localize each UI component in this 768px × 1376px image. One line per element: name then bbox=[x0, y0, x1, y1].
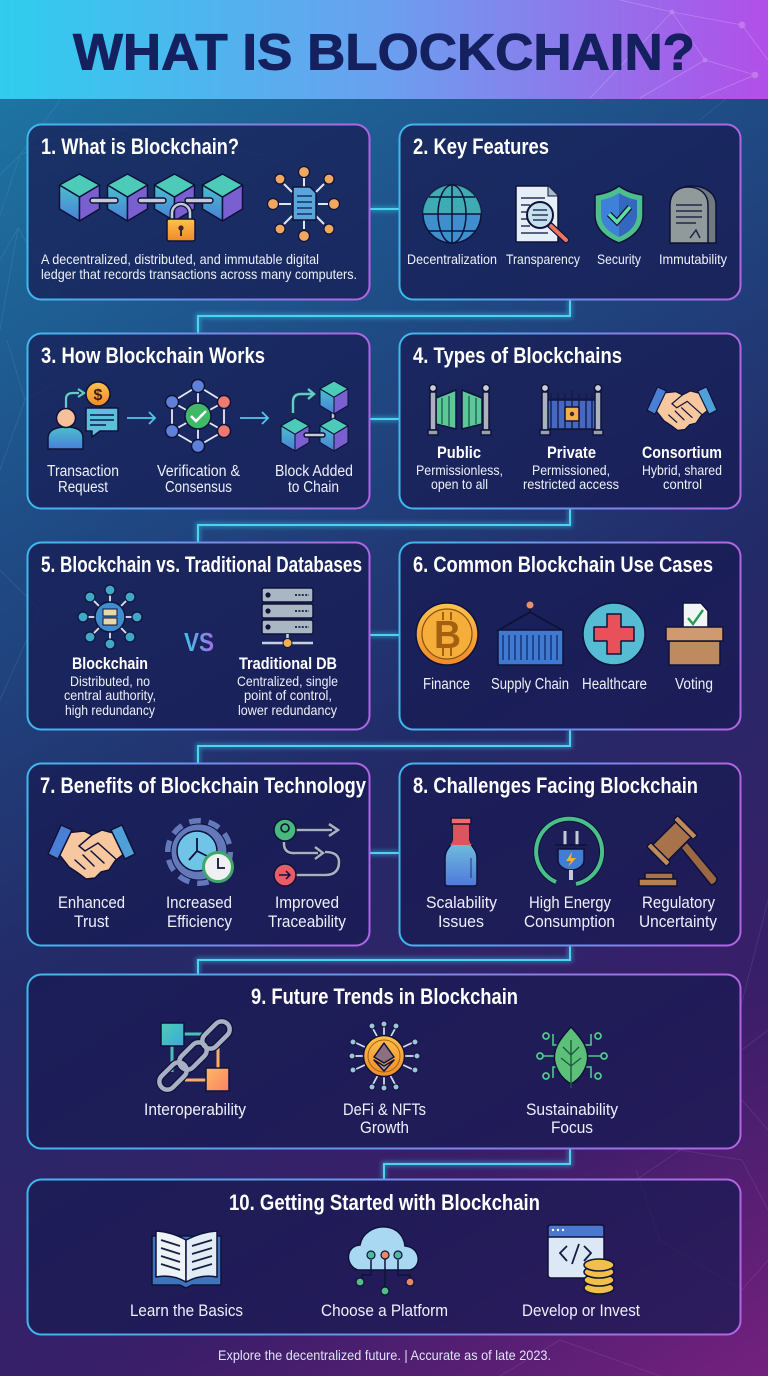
icon: chain of cubes with padlock bbox=[60, 174, 242, 241]
label: Interoperability bbox=[144, 1100, 246, 1119]
icon: shield bbox=[595, 186, 643, 243]
arrow bbox=[240, 412, 268, 424]
column: blockchain: Blockchain bbox=[72, 655, 148, 673]
header network pattern bbox=[590, 0, 768, 98]
title: WHAT IS BLOCKCHAIN? bbox=[73, 24, 695, 80]
label: Consumption bbox=[524, 912, 615, 931]
icon: transaction request: $ bbox=[94, 387, 103, 404]
type: private: restricted access bbox=[523, 476, 619, 492]
label: Immutability bbox=[659, 251, 727, 267]
vs label: VS bbox=[184, 627, 214, 657]
icon: code window with coins bbox=[548, 1225, 614, 1294]
type: private: Private bbox=[547, 444, 596, 462]
icon: cloud platform bbox=[348, 1227, 418, 1295]
label: Finance bbox=[423, 676, 470, 693]
column: blockchain: central authority, bbox=[64, 687, 156, 703]
type: public: open to all bbox=[431, 476, 488, 492]
label: Focus bbox=[551, 1118, 593, 1137]
label: Voting bbox=[675, 676, 713, 693]
icon: locked gate bbox=[540, 384, 603, 435]
label bbox=[166, 893, 232, 931]
description: ledger that records transactions across many computers. bbox=[41, 266, 357, 282]
heading: 1. What is Blockchain? bbox=[41, 134, 239, 159]
connectors bbox=[198, 209, 570, 1179]
heading: 4. Types of Blockchains bbox=[413, 343, 622, 368]
icon: bottle bbox=[445, 818, 477, 886]
label: Regulatory bbox=[642, 893, 715, 912]
label bbox=[58, 893, 125, 931]
icon: traceability route bbox=[274, 819, 339, 886]
label: High Energy bbox=[529, 893, 611, 912]
type: private: Permissioned, bbox=[532, 462, 610, 478]
type: consortium bbox=[642, 444, 722, 492]
panel: 1 What is Blockchain bbox=[28, 124, 370, 300]
label: Trust bbox=[74, 912, 109, 931]
panel: 4 Types of Blockchains bbox=[400, 334, 740, 508]
icon: medical cross bbox=[583, 603, 645, 665]
icon: energy plug bbox=[536, 819, 602, 884]
label: Decentralization bbox=[407, 251, 497, 267]
type: private bbox=[523, 444, 619, 492]
column: traditional db bbox=[237, 655, 338, 718]
footer note: Explore the decentralized future. | Accurate as of late 2023. bbox=[218, 1347, 551, 1363]
heading: 7. Benefits of Blockchain Technology bbox=[40, 773, 367, 798]
label bbox=[426, 893, 497, 931]
label: Transaction bbox=[47, 463, 119, 480]
label bbox=[343, 1100, 426, 1137]
label: Sustainability bbox=[526, 1100, 618, 1119]
label: Improved bbox=[275, 893, 339, 912]
icon: gavel bbox=[639, 816, 717, 886]
icon: globe bbox=[423, 185, 481, 243]
panel: 2 Key Features bbox=[400, 124, 740, 300]
type: public: Permissionless, bbox=[416, 462, 503, 478]
label: Growth bbox=[360, 1118, 409, 1137]
panel: 7 Benefits bbox=[28, 764, 370, 946]
icon: bitcoin coin bbox=[416, 603, 478, 665]
icon: open gate bbox=[428, 384, 491, 435]
label: Verification & bbox=[157, 463, 241, 480]
icon: server stack bbox=[262, 588, 313, 648]
label: Increased bbox=[166, 893, 232, 912]
heading: 3. How Blockchain Works bbox=[41, 343, 265, 368]
type: public bbox=[416, 444, 503, 492]
panel: 8 Challenges bbox=[400, 764, 740, 946]
label: Transparency bbox=[506, 251, 580, 267]
label: Issues bbox=[438, 912, 484, 931]
icon: document network bbox=[268, 166, 340, 242]
label: Efficiency bbox=[167, 912, 232, 931]
column: blockchain: high redundancy bbox=[65, 702, 155, 718]
label: DeFi & NFTs bbox=[343, 1100, 426, 1119]
label bbox=[639, 893, 717, 931]
label: Scalability bbox=[426, 893, 497, 912]
icon: chain interoperability bbox=[156, 1018, 233, 1093]
column: blockchain: Distributed, no bbox=[70, 673, 150, 689]
panel: 10 Getting Started bbox=[28, 1180, 740, 1334]
label: Request bbox=[58, 479, 109, 496]
icon: gear with clocks bbox=[170, 822, 232, 882]
header band bbox=[0, 0, 768, 99]
icon: distributed network bbox=[78, 585, 142, 649]
label: Consensus bbox=[165, 479, 232, 496]
icon: open book bbox=[152, 1231, 221, 1288]
icon: block added to chain bbox=[281, 381, 348, 451]
label: Block Added bbox=[275, 463, 353, 480]
type: consortium: Hybrid, shared bbox=[642, 462, 722, 478]
description bbox=[41, 251, 357, 282]
icon: transaction request bbox=[48, 382, 118, 449]
heading: 10. Getting Started with Blockchain bbox=[229, 1190, 540, 1215]
panel: 9 Future Trends bbox=[28, 974, 740, 1148]
icon: document with magnifier bbox=[516, 186, 566, 242]
icon: verification network bbox=[166, 380, 230, 452]
icon: leaf circuit bbox=[537, 1027, 607, 1088]
panel: 3 How Blockchain Works bbox=[28, 334, 370, 508]
column: traditional db: Centralized, single bbox=[237, 673, 338, 689]
heading: 6. Common Blockchain Use Cases bbox=[413, 552, 713, 577]
label bbox=[524, 893, 615, 931]
column: blockchain bbox=[64, 655, 156, 718]
panel: 6 Common Use Cases bbox=[400, 542, 740, 730]
label: Supply Chain bbox=[491, 676, 569, 693]
heading: 2. Key Features bbox=[413, 134, 549, 159]
type: public: Public bbox=[437, 444, 481, 462]
type: consortium: control bbox=[663, 476, 702, 492]
icon: handshake bbox=[647, 387, 717, 430]
column: traditional db: lower redundancy bbox=[238, 702, 337, 718]
connectors glow bbox=[198, 209, 570, 1179]
panel: 5 Blockchain vs Traditional Databases bbox=[28, 542, 370, 730]
label: Healthcare bbox=[582, 676, 647, 693]
type: consortium: Consortium bbox=[642, 444, 722, 462]
label: Traceability bbox=[268, 912, 346, 931]
column: traditional db: point of control, bbox=[244, 687, 332, 703]
icon: bitcoin coin: B bbox=[434, 614, 461, 657]
label bbox=[526, 1100, 618, 1137]
icon: handshake bbox=[48, 825, 135, 879]
label: Learn the Basics bbox=[130, 1301, 243, 1320]
heading: 8. Challenges Facing Blockchain bbox=[413, 773, 698, 798]
description: A decentralized, distributed, and immutable digital bbox=[41, 251, 319, 267]
icon: ballot box bbox=[666, 603, 723, 665]
heading: 9. Future Trends in Blockchain bbox=[251, 984, 518, 1009]
label: Enhanced bbox=[58, 893, 125, 912]
label: Choose a Platform bbox=[321, 1301, 448, 1320]
icon: ethereum coin bbox=[349, 1021, 420, 1091]
icon: tombstone bbox=[670, 186, 716, 243]
column: traditional db: Traditional DB bbox=[239, 655, 337, 673]
heading: 5. Blockchain vs. Traditional Databases bbox=[41, 552, 362, 577]
icon: shipping container bbox=[497, 602, 564, 665]
label: Security bbox=[597, 251, 641, 267]
arrow bbox=[127, 412, 155, 424]
label bbox=[268, 893, 346, 931]
label: to Chain bbox=[288, 479, 339, 496]
label: Develop or Invest bbox=[522, 1301, 640, 1320]
label: Uncertainty bbox=[639, 912, 717, 931]
